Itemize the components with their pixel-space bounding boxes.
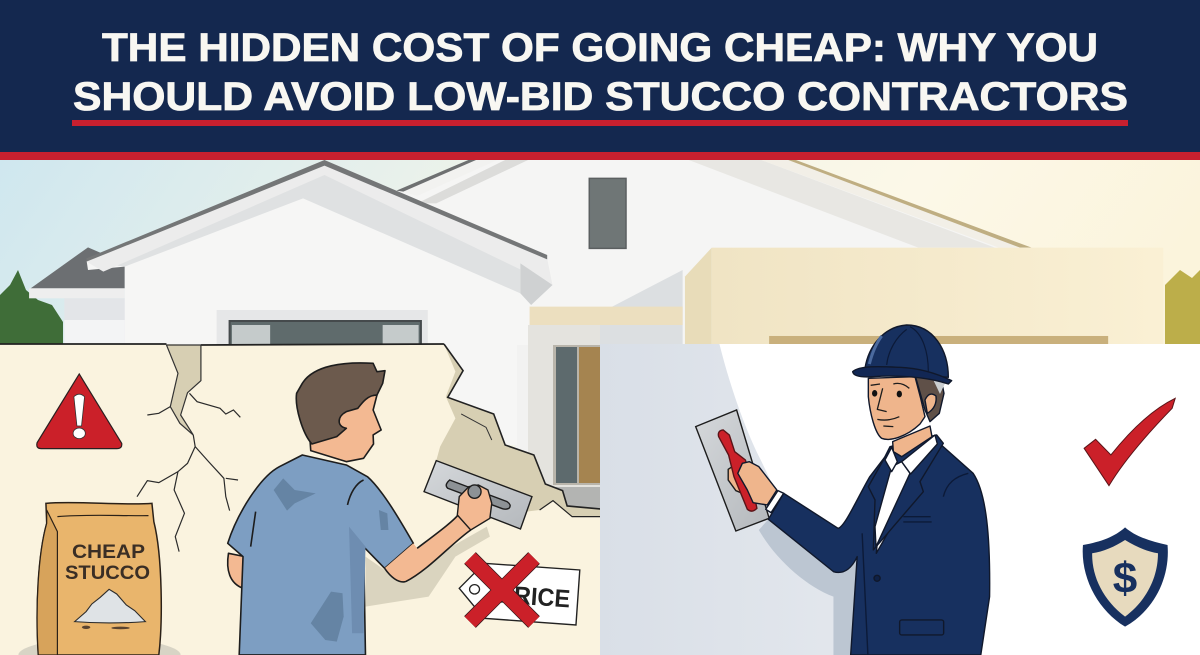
header banner: [0, 0, 1200, 160]
panel: cheap contractor: [0, 344, 600, 655]
header red rule: [0, 152, 1200, 160]
panel: professional contractor: [600, 325, 1200, 655]
title: THE HIDDEN COST OF GOING CHEAP: WHY YOU: [102, 26, 1098, 70]
icon: red cross over price: [470, 558, 534, 622]
trowel: [696, 410, 769, 531]
bag label: [65, 542, 150, 584]
entry and front door: [445, 325, 600, 515]
trowel: [424, 461, 532, 530]
smooth stucco wall: [600, 344, 857, 655]
stucco powder pile: [75, 589, 145, 623]
title underline: [72, 120, 1128, 126]
cheap stucco bag: [37, 503, 161, 655]
wall with cracked edge: [0, 344, 600, 655]
title: SHOULD AVOID LOW-BID STUCCO CONTRACTORS: [73, 75, 1128, 119]
price tag label: PRICE: [497, 580, 571, 613]
bag label: STUCCO: [65, 563, 150, 584]
icon: warning triangle: [37, 374, 122, 449]
hero: house photo background: [0, 160, 1200, 515]
professional man head and collar: [853, 325, 968, 550]
arm shadow on wall: [759, 519, 857, 655]
wall shadow behind man: [365, 527, 490, 607]
hard hat: [853, 325, 952, 384]
trees: left: [0, 270, 63, 345]
trees: right: [1165, 270, 1200, 345]
house drawing upper: [29, 160, 1163, 383]
title: [73, 26, 1128, 119]
icon: dollar shield: [1083, 527, 1168, 627]
price tag: [459, 563, 580, 625]
professional man body: [738, 442, 990, 655]
dollar sign: $: [1113, 554, 1137, 603]
crack in wall: [137, 345, 240, 552]
worker: [228, 363, 492, 655]
bag label: CHEAP: [72, 542, 145, 563]
bag shadow: [18, 638, 181, 655]
icon: red check mark: [1084, 398, 1175, 486]
